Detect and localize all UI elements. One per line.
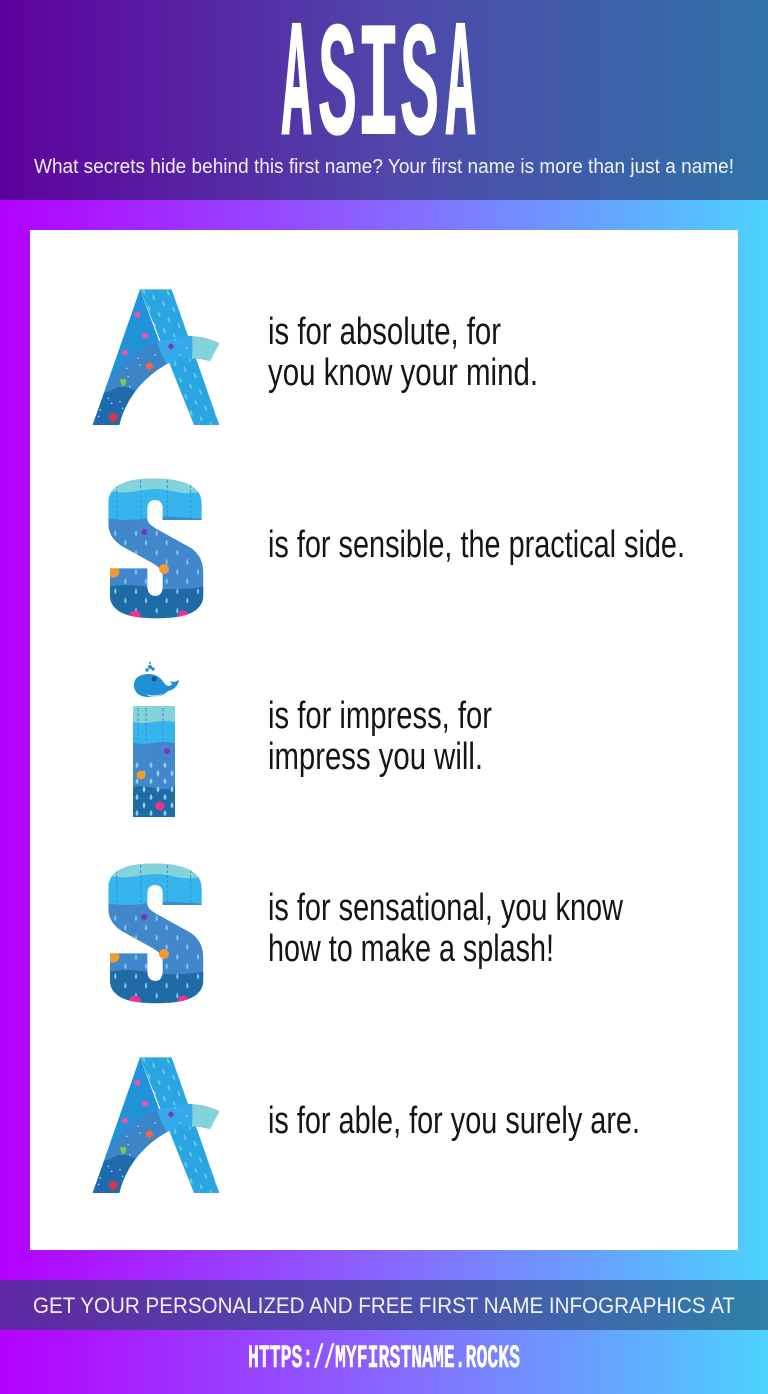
- title: S: [318, 0, 357, 184]
- title: I: [356, 0, 401, 184]
- subtitle: What secrets hide behind this first name? Your first name is more than just a name!: [34, 156, 734, 178]
- footer band: [0, 1280, 768, 1330]
- icon: letter A illustration 2: [92, 1057, 220, 1193]
- text: A line: you know your mind.: [268, 352, 538, 394]
- text: I line: impress you will.: [268, 736, 483, 778]
- title: A: [282, 0, 311, 183]
- text: S line 2: is for sensational, you know: [268, 887, 623, 929]
- text: S line 2: [268, 887, 623, 970]
- white content panel: [30, 230, 738, 1250]
- text: I line: [268, 695, 492, 778]
- title: [282, 0, 475, 184]
- icon: letter S illustration: [107, 477, 205, 623]
- title: S: [400, 0, 439, 184]
- flowers: [122, 312, 148, 356]
- text: I line: is for impress, for: [268, 695, 492, 737]
- text: A line 2: is for able, for you surely are.: [268, 1100, 640, 1142]
- header band: [0, 0, 768, 200]
- text: A line: is for absolute, for: [268, 311, 501, 353]
- fish: [168, 344, 174, 349]
- text: S line 2: how to make a splash!: [268, 928, 554, 970]
- footer url: HTTPS://MYFIRSTNAME.ROCKS: [248, 1340, 520, 1377]
- header band: A: [446, 0, 475, 183]
- text: A line: [268, 311, 538, 394]
- whale: [134, 662, 179, 697]
- icon: letter S illustration 2: [107, 862, 205, 1008]
- icon: letter I with whale: [133, 662, 179, 817]
- icon: letter A illustration: [92, 289, 220, 425]
